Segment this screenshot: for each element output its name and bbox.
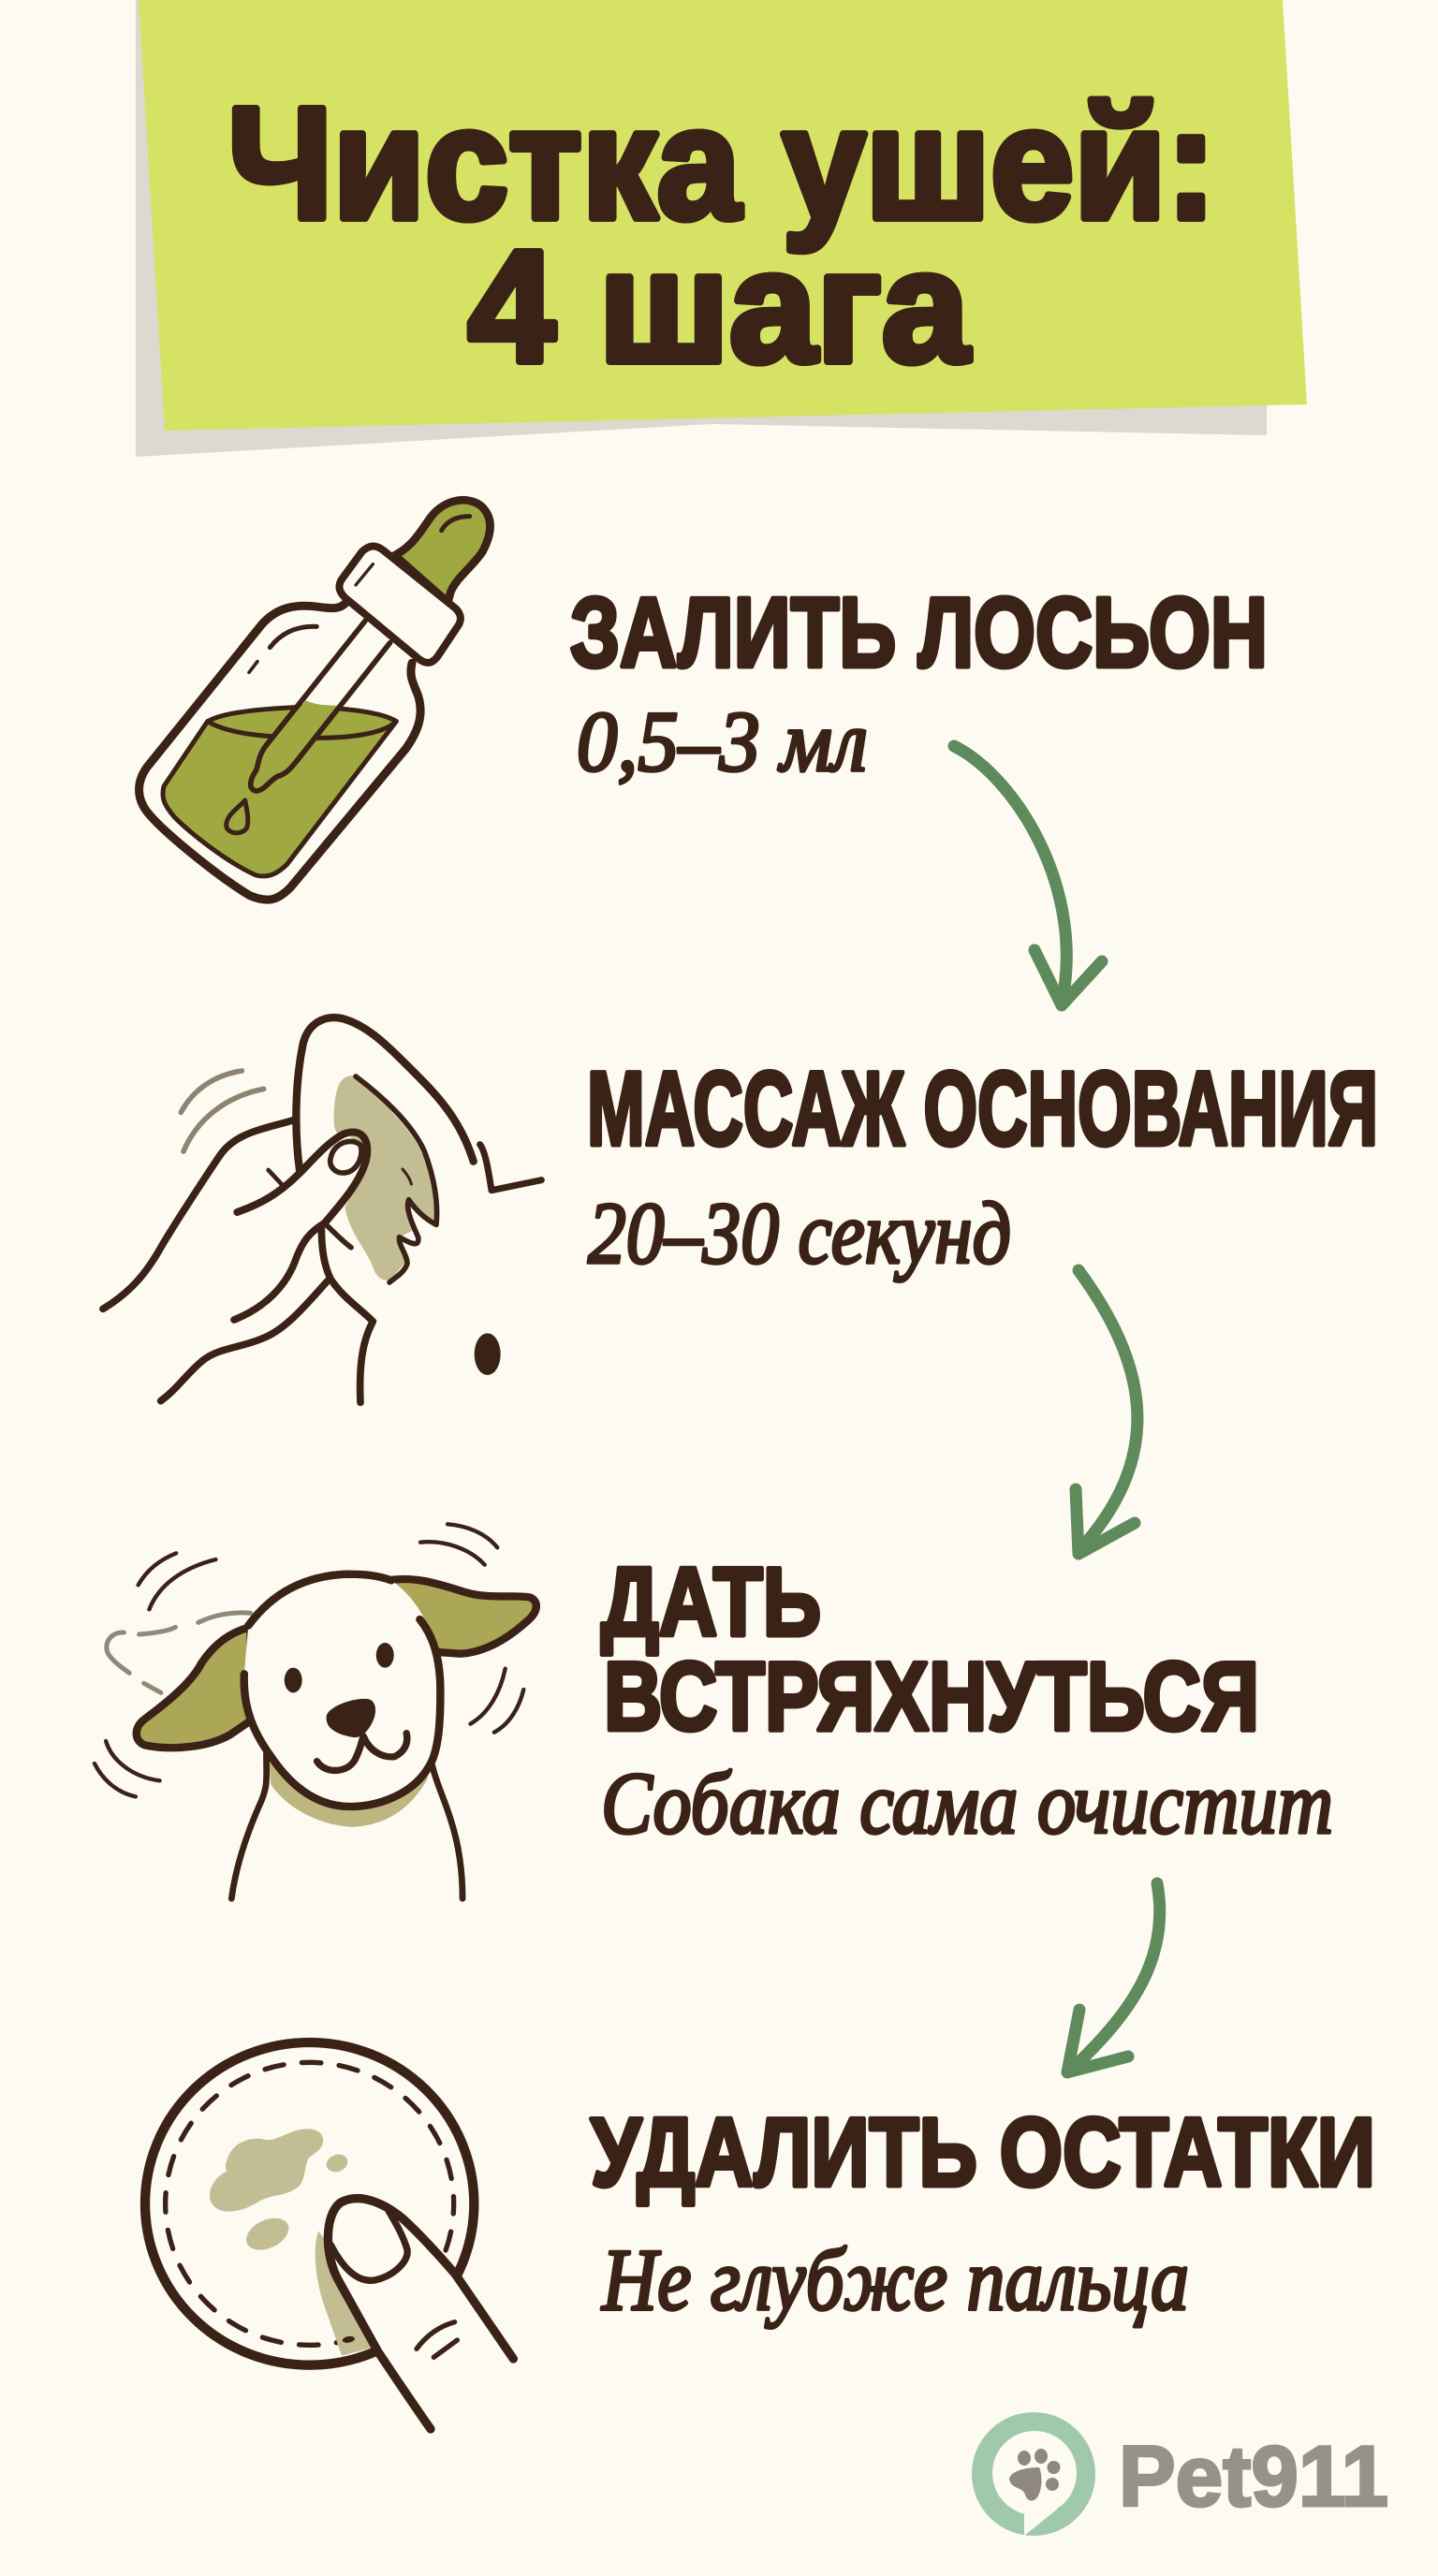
icon: shaking dog	[95, 1524, 536, 1898]
title: 4 шага	[468, 218, 970, 396]
step 2 text	[587, 1050, 1378, 1282]
step 3 text	[601, 1548, 1333, 1852]
arrow 2	[1076, 1270, 1137, 1554]
title panel	[136, 0, 1307, 457]
title	[227, 75, 1216, 396]
title: Чистка ушей:	[227, 75, 1216, 253]
step 2 text: 20–30 секунд	[588, 1185, 1011, 1282]
icon: dropper bottle	[139, 500, 491, 900]
step 1 text	[570, 578, 1268, 789]
step 4 text	[591, 2099, 1375, 2329]
step 3 text: ВСТРЯХНУТЬСЯ	[604, 1643, 1259, 1751]
step 1 text: 0,5–3 мл	[577, 694, 868, 789]
wordmark: Pet911	[1119, 2429, 1388, 2525]
step 3 text: Собака сама очистит	[601, 1755, 1333, 1852]
icon: cotton pad and finger	[145, 2042, 513, 2429]
step 3 text: ДАТЬ	[601, 1548, 821, 1657]
arrow 1	[954, 746, 1102, 1005]
step 4 text: Не глубже пальца	[600, 2232, 1189, 2329]
icon: paw speech bubble	[972, 2412, 1095, 2536]
icon: hand massaging ear	[103, 1017, 541, 1402]
logo: Pet911	[972, 2412, 1388, 2536]
arrow 3	[1067, 1883, 1160, 2072]
step 1 text: ЗАЛИТЬ ЛОСЬОН	[570, 578, 1268, 688]
